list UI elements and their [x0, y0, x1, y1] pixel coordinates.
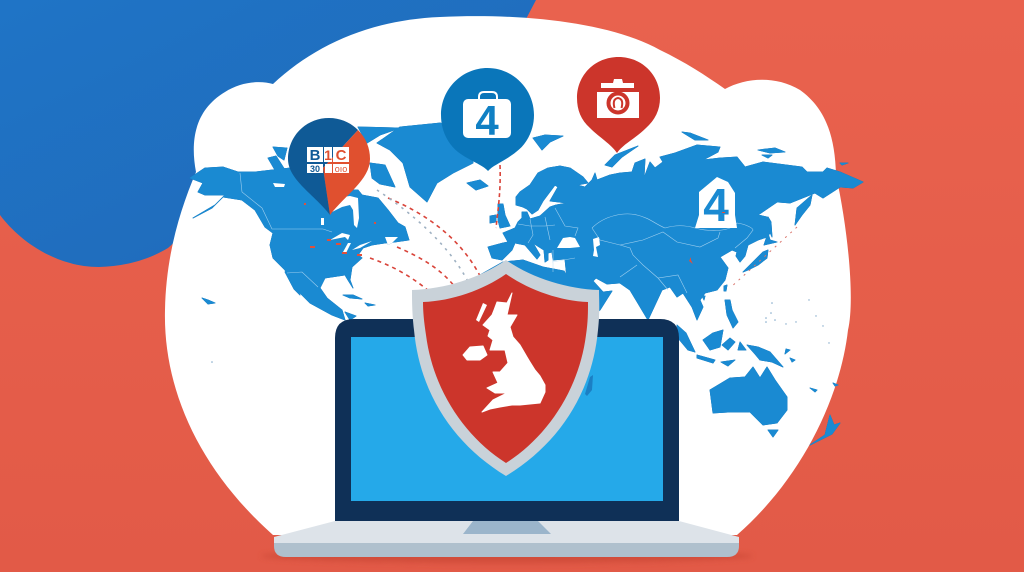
lens ring [608, 94, 628, 112]
red arc from US south [370, 258, 430, 292]
laptop [261, 319, 753, 563]
laptop screen [351, 337, 663, 501]
red map markers [304, 203, 693, 264]
grey arc from Canada [377, 190, 473, 292]
bag handle [479, 92, 497, 100]
BBC logo tiles: oıo [335, 164, 347, 174]
number 4: 4 [475, 97, 499, 144]
Japan, Sakhalin, Kamchatka [743, 195, 812, 272]
pin orange half [323, 130, 370, 215]
Pacific dots [211, 299, 830, 363]
white cloud backdrop [165, 16, 851, 535]
shield outer rim [412, 260, 599, 476]
Southeast Asia [677, 300, 746, 366]
inland seas [557, 237, 600, 257]
pin body [577, 57, 660, 153]
blue corner shape [0, 0, 536, 267]
Eurasia [488, 145, 863, 320]
blue Channel 4 pin [441, 68, 534, 171]
red arc from US east coast [397, 247, 455, 287]
Africa top [420, 260, 580, 322]
stray island over screen [585, 375, 593, 396]
pin body [441, 68, 534, 171]
Pacific islands [785, 349, 838, 392]
Hudson Bay water [330, 196, 359, 228]
blue pin line [496, 165, 500, 228]
country borders [240, 173, 753, 293]
Taiwan and Hainan [702, 285, 727, 300]
laptop hinge [463, 521, 551, 534]
laptop deck [274, 521, 739, 544]
dashed connection lines [370, 165, 797, 292]
number 4: 4 [703, 179, 729, 231]
Arctic islands [268, 127, 400, 187]
Great Britain silhouette [482, 293, 545, 412]
BBC logo tiles: 30 [310, 164, 320, 174]
red camera pin [577, 57, 660, 153]
shield with UK map [412, 260, 599, 476]
BBC logo tiles [307, 147, 349, 174]
Hebrides [476, 303, 487, 322]
building silhouette [695, 177, 737, 228]
red accent [722, 212, 725, 213]
lakes and gulf water [273, 183, 398, 253]
Iceland, Britain, Ireland [467, 180, 510, 228]
camera body [597, 92, 639, 118]
world map [190, 123, 863, 445]
red arc from Canada [388, 198, 487, 292]
laptop lid [335, 319, 679, 521]
shield red face [423, 274, 588, 463]
Australia [710, 367, 787, 425]
BBC logo tiles: B [310, 147, 321, 164]
pin blue half [288, 118, 358, 215]
North America [190, 165, 409, 320]
Channel 4 building icon on Russia [695, 177, 737, 231]
Ireland silhouette [463, 346, 487, 360]
lid [601, 79, 634, 88]
Greenland [377, 123, 473, 202]
bag body [463, 99, 511, 138]
New Guinea [747, 345, 783, 367]
base shadow [261, 549, 753, 563]
BBC logo tiles: 1 [324, 147, 332, 163]
BBC map pin [288, 118, 370, 215]
Tasmania and New Zealand [768, 415, 840, 445]
laptop front edge [274, 543, 739, 557]
Arctic archipelagos [533, 132, 848, 167]
Caribbean, Baja and Hawaii [202, 272, 375, 320]
Asia line [730, 227, 797, 288]
BBC logo tiles: C [336, 147, 347, 164]
